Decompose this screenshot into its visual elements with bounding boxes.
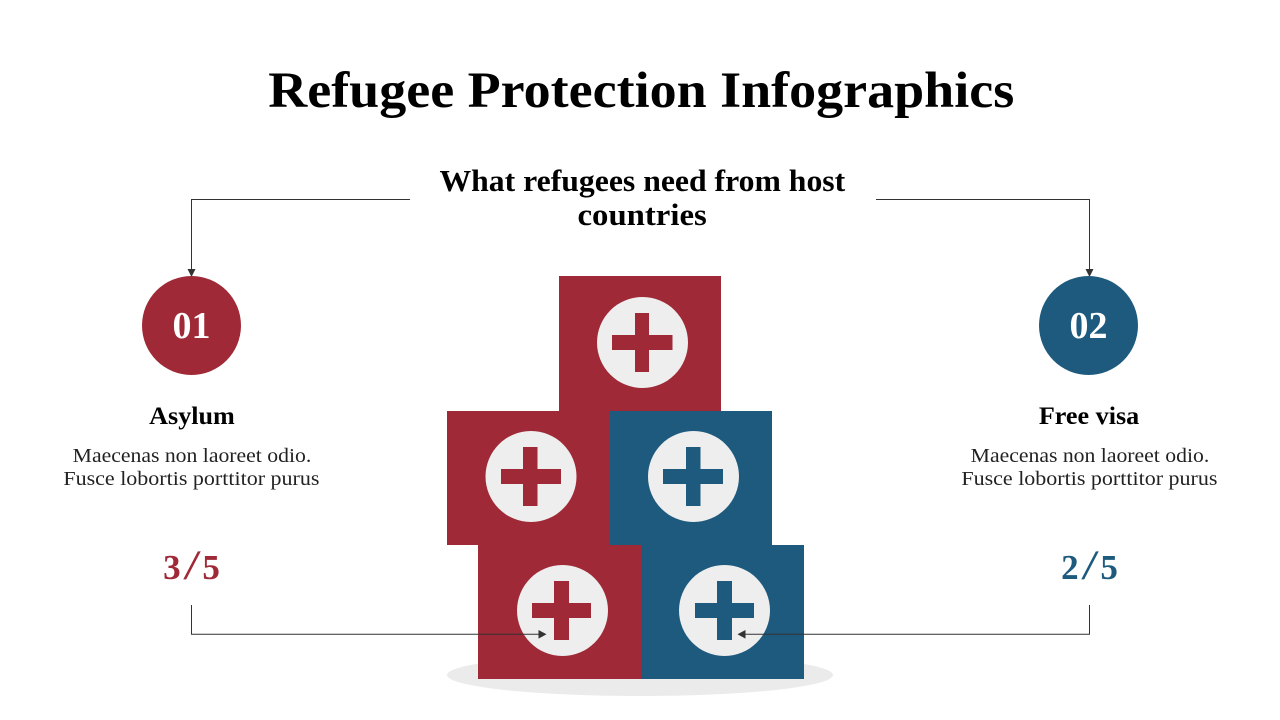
panel: free visa (961, 276, 1218, 589)
subtitle: countries (578, 197, 707, 232)
shadow ellipse (447, 654, 833, 696)
block: bottom red (478, 545, 641, 679)
badge 01 (142, 276, 241, 375)
heading: free visa: Free visa (1039, 403, 1140, 430)
subtitle: What refugees need from host (440, 163, 845, 198)
panel: asylum (63, 276, 320, 589)
block stack (447, 276, 804, 679)
stat 3/5: 3 5 (163, 548, 220, 587)
arrow: subtitle to 02 (876, 200, 1094, 277)
body text (63, 445, 320, 490)
body text: Maecenas non laoreet odio. (970, 445, 1209, 467)
heading: asylum: Asylum (149, 403, 234, 430)
block: top red (559, 276, 721, 411)
block: middle blue (610, 411, 772, 545)
body text: Fusce lobortis porttitor purus (961, 468, 1218, 490)
arrow: 2/5 to blue blocks (738, 605, 1090, 639)
title: Refugee Protection Infographics (268, 63, 1014, 119)
stat 3/5: / (182, 543, 201, 589)
body text (961, 445, 1218, 490)
stat 2/5: / (1080, 543, 1099, 589)
badge 01: 01 (172, 305, 210, 347)
stat 2/5: 2 5 (1061, 548, 1118, 587)
body text: Maecenas non laoreet odio. (72, 445, 311, 467)
block: middle red (447, 411, 610, 545)
block: bottom blue (641, 545, 804, 679)
arrow: 3/5 to red blocks (192, 605, 546, 639)
arrow: subtitle to 01 (188, 200, 410, 277)
subtitle (440, 163, 846, 232)
badge 02 (1039, 276, 1138, 375)
badge 02: 02 (1070, 305, 1108, 347)
body text: Fusce lobortis porttitor purus (63, 468, 320, 490)
